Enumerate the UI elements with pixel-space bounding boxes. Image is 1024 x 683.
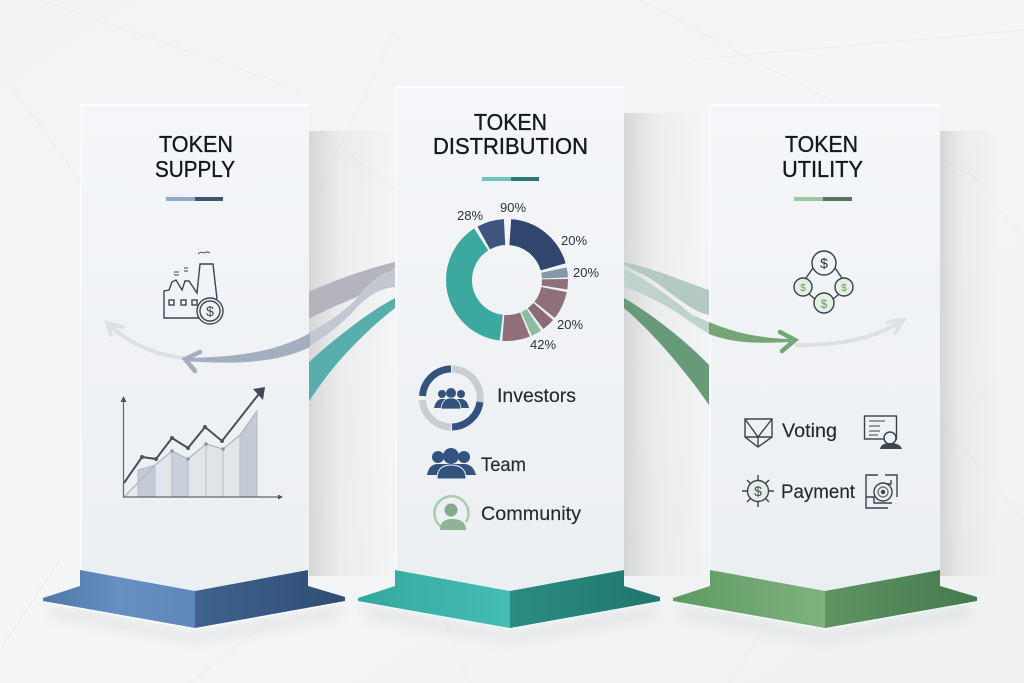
heading: token distribution	[433, 109, 588, 159]
heading: token distribution: DISTRIBUTION	[433, 133, 588, 159]
icon: coin network	[794, 251, 853, 313]
icon: certificate with person	[864, 416, 902, 449]
donut labels	[457, 200, 599, 352]
heading: token distribution: TOKEN	[474, 109, 547, 135]
label: voting: Voting	[782, 421, 837, 442]
label: community: Community	[481, 504, 582, 525]
flow bands: distribution to supply	[308, 262, 395, 403]
heading: token supply: TOKEN	[159, 131, 233, 157]
panel: token utility	[710, 105, 940, 591]
icon: coin network: $	[841, 283, 847, 294]
arrow: supply, solid	[184, 333, 310, 371]
donut labels: 90%	[500, 200, 526, 215]
donut labels: 20%	[561, 233, 587, 248]
base ribbon: teal	[358, 570, 660, 629]
panel: token supply	[81, 105, 309, 591]
heading: token utility: TOKEN	[785, 131, 858, 157]
accent bar: distribution	[482, 177, 539, 181]
label: investors: Investors	[497, 386, 576, 407]
icon: voting shield	[745, 419, 772, 447]
base ribbon: green	[673, 570, 977, 629]
accent bar: utility	[794, 197, 852, 201]
label: team: Team	[481, 455, 526, 476]
arrow: supply, faded	[107, 323, 183, 358]
icon: investors ring	[422, 369, 480, 427]
label: payment: Payment	[781, 482, 856, 503]
icon: coin network: $	[821, 297, 828, 311]
panel: token distribution	[396, 87, 624, 591]
donut chart	[459, 232, 555, 328]
heading: token utility	[782, 131, 863, 182]
icon: payment coin gear: $	[754, 483, 762, 499]
icon: team	[427, 448, 476, 479]
heading: token supply	[155, 131, 235, 182]
donut labels: 28%	[457, 208, 483, 223]
icon: factory with coin: $	[206, 303, 214, 319]
icon: coin network: $	[820, 255, 828, 271]
heading: token utility: UTILITY	[782, 156, 863, 182]
chart bars	[124, 411, 257, 497]
icon: coin network: $	[800, 283, 806, 294]
icon: secure vault	[866, 475, 897, 508]
base ribbon: blue	[43, 570, 345, 629]
icon: community	[434, 496, 468, 530]
panel shadows	[50, 113, 1002, 642]
icon: payment coin gear	[742, 475, 774, 507]
donut labels: 20%	[557, 317, 583, 332]
chart: supply growth	[120, 387, 283, 500]
accent bar: supply	[166, 197, 223, 201]
arrow: utility, solid	[709, 322, 795, 351]
donut labels: 42%	[530, 337, 556, 352]
heading: token supply: SUPPLY	[155, 156, 235, 182]
donut labels: 20%	[573, 265, 599, 280]
icon: factory with coin	[164, 252, 223, 324]
arrow: utility, faded	[797, 320, 903, 345]
flow bands: distribution to utility	[624, 262, 709, 405]
